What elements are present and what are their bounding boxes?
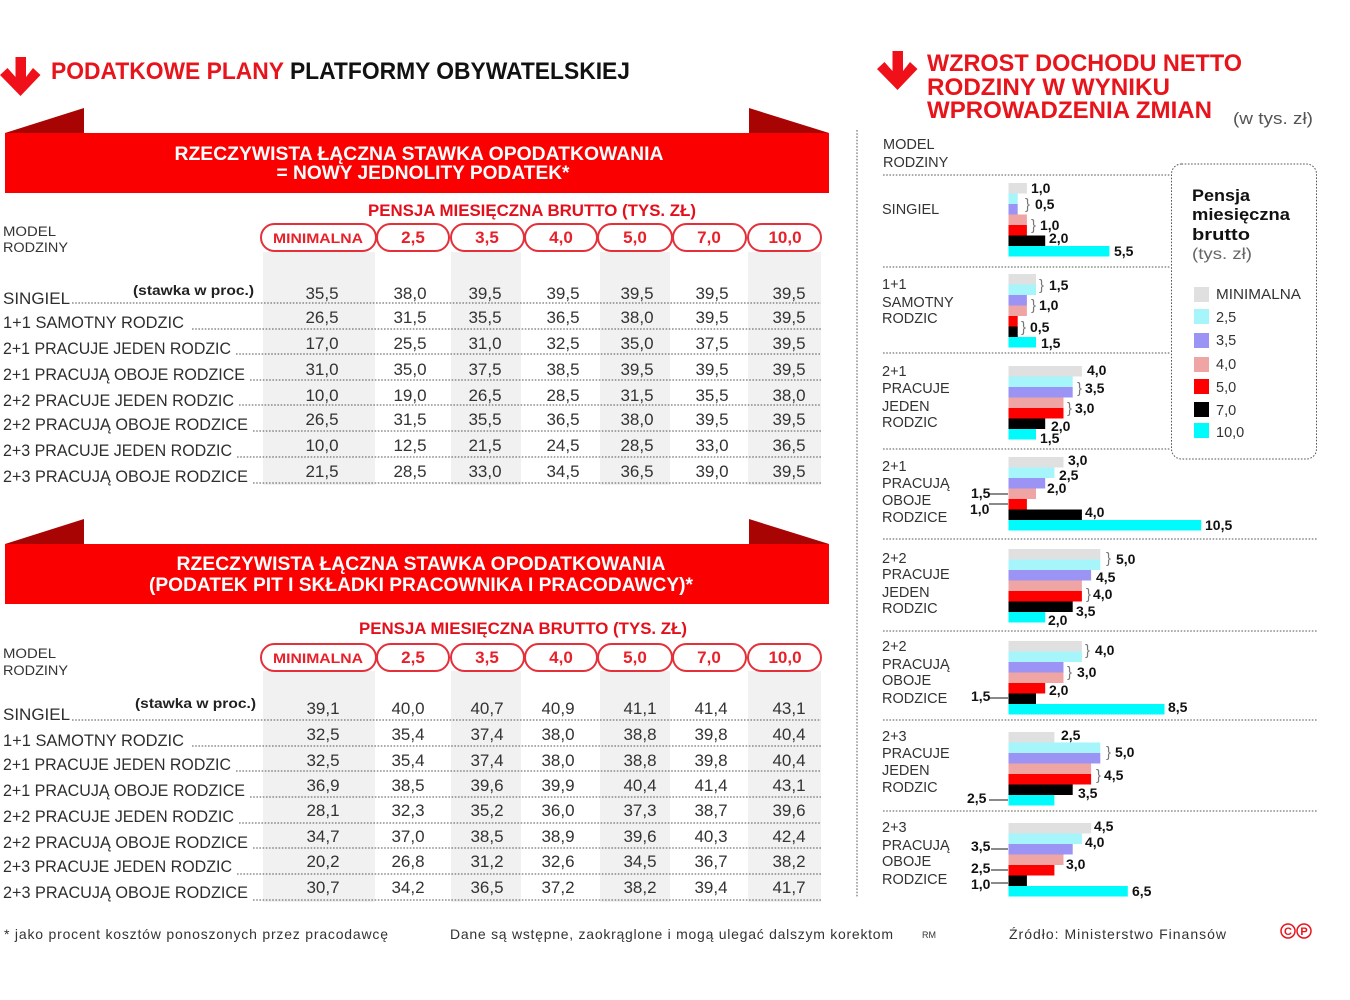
chart group: singiel: 2,0 xyxy=(1049,230,1069,246)
pills: bottom table header: 4,0 xyxy=(549,648,573,667)
table: bottom rates: 36,0 xyxy=(541,801,575,820)
banner: top table xyxy=(5,108,829,193)
pills: top table header xyxy=(261,224,821,251)
table: top rates: 31,0 xyxy=(305,360,339,379)
table: top rates: 21,5 xyxy=(468,436,502,455)
legend panel xyxy=(1172,164,1316,459)
table: top rates: 39,5 xyxy=(695,308,729,327)
table: bottom rates: 37,3 xyxy=(623,801,657,820)
chart group: singiel xyxy=(882,180,1134,259)
table: top rates: 35,0 xyxy=(393,360,427,379)
table: top rates: 12,5 xyxy=(393,436,427,455)
pills: top table header: 3,5 xyxy=(475,228,499,247)
chart group: singiel: 1,0 xyxy=(1031,180,1051,196)
table: top rates: 36,5 xyxy=(546,410,580,429)
table: top rates: 38,0 xyxy=(393,284,427,303)
banner: bottom table xyxy=(5,519,829,604)
table: top rates: 26,5 xyxy=(468,386,502,405)
chart group: 1+1 samotny rodzic: RODZIC xyxy=(882,311,938,327)
title: right: RODZINY W WYNIKU xyxy=(927,74,1170,101)
legend panel: 2,5 xyxy=(1216,310,1236,326)
chart group: 2+3 pracuje jeden rodzic: } xyxy=(1096,767,1101,784)
chart group: 2+3 pracują oboje rodzice: OBOJE xyxy=(882,854,931,870)
heading: family model bottom table: RODZINY xyxy=(3,663,68,678)
note: unit top table: (stawka w proc.) xyxy=(133,282,254,298)
chart group: 2+3 pracuje jeden rodzic: RODZIC xyxy=(882,780,938,796)
chart group: 1+1 samotny rodzic: } xyxy=(1021,319,1026,336)
table: bottom rates: 39,6 xyxy=(772,801,806,820)
chart group: 2+3 pracuje jeden rodzic: PRACUJE xyxy=(882,746,950,762)
table: bottom rates: 36,9 xyxy=(306,776,340,795)
table: bottom rates: 32,6 xyxy=(541,852,575,871)
table: top rates: 28,5 xyxy=(620,436,654,455)
legend panel: brutto xyxy=(1192,225,1250,244)
table: top rates: 28,5 xyxy=(546,386,580,405)
chart group: 2+2 pracuje jeden rodzic xyxy=(882,549,1136,628)
icon: copyright marks: P xyxy=(1300,926,1308,938)
source: Źródło: Ministerstwo Finansów xyxy=(1009,926,1227,942)
table: bottom rates: 35,2 xyxy=(470,801,504,820)
table: top rates: 1+1 SAMOTNY RODZIC xyxy=(3,313,184,332)
chart group: 2+1 pracują oboje rodzice: 1,0 xyxy=(970,501,990,517)
legend panel: 3,5 xyxy=(1216,333,1236,349)
table: top rates: 2+1 PRACUJE JEDEN RODZIC xyxy=(3,339,231,358)
chart group: 2+2 pracuje jeden rodzic: } xyxy=(1086,586,1091,603)
table: top rates: 31,5 xyxy=(393,308,427,327)
table: top rates: 2+2 PRACUJĄ OBOJE RODZICE xyxy=(3,415,248,434)
table: bottom rates: 41,4 xyxy=(694,699,728,718)
chart group: 1+1 samotny rodzic: } xyxy=(1039,277,1044,294)
chart group: 2+1 pracują oboje rodzice xyxy=(882,452,1232,533)
table: top rates: 28,5 xyxy=(393,462,427,481)
table: top rates: 19,0 xyxy=(393,386,427,405)
table: bottom rates: 30,7 xyxy=(306,878,340,897)
chart group: 2+2 pracują oboje rodzice: 8,5 xyxy=(1168,699,1188,715)
pills: top table header: 7,0 xyxy=(697,228,721,247)
table: bottom rates: 38,0 xyxy=(541,725,575,744)
chart group: 2+1 pracuje jeden rodzic: } xyxy=(1067,400,1072,417)
chart group: singiel: 5,5 xyxy=(1114,243,1134,259)
chart group: 2+3 pracuje jeden rodzic: 2,5 xyxy=(1061,727,1081,743)
banner: top table: = NOWY JEDNOLITY PODATEK* xyxy=(276,163,570,184)
chart group: 2+2 pracują oboje rodzice: OBOJE xyxy=(882,673,931,689)
table: bottom rates: 20,2 xyxy=(306,852,340,871)
chart group: 2+2 pracują oboje rodzice: } xyxy=(1067,664,1072,681)
chart group: singiel: 0,5 xyxy=(1035,196,1055,212)
chart group: 2+1 pracuje jeden rodzic: RODZIC xyxy=(882,415,938,431)
chart group: singiel: 1,0 xyxy=(1040,217,1060,233)
table: top rates: 39,5 xyxy=(620,284,654,303)
chart group: 2+1 pracuje jeden rodzic: 2,0 xyxy=(1051,418,1071,434)
table background: bottom columns xyxy=(263,671,821,902)
heading: chart family model: RODZINY xyxy=(883,155,949,171)
pills: top table header: 4,0 xyxy=(549,228,573,247)
chart group: 2+1 pracują oboje rodzice: 10,5 xyxy=(1205,517,1232,533)
chart group: 2+3 pracują oboje rodzice: 6,5 xyxy=(1132,883,1152,899)
chart group: 2+3 pracują oboje rodzice: 4,5 xyxy=(1094,818,1114,834)
unit note: (w tys. zł) xyxy=(1233,109,1313,128)
table: bottom rates: 41,1 xyxy=(623,699,657,718)
title: left: PODATKOWE PLANY PLATFORMY OBYWATELSKIEJ xyxy=(51,58,630,85)
table: bottom rates: 26,8 xyxy=(391,852,425,871)
table: bottom rates: 40,9 xyxy=(541,699,575,718)
table: bottom rates: 40,4 xyxy=(772,725,806,744)
table: bottom rates: 34,5 xyxy=(623,852,657,871)
chart group: 2+2 pracuje jeden rodzic: PRACUJE xyxy=(882,567,950,583)
table: bottom rates: 2+2 PRACUJE JEDEN RODZIC xyxy=(3,807,234,826)
table: bottom rates: 41,4 xyxy=(694,776,728,795)
table: top rates: 31,5 xyxy=(620,386,654,405)
table: bottom rates: 38,5 xyxy=(391,776,425,795)
chart group: 2+1 pracuje jeden rodzic: JEDEN xyxy=(882,399,930,415)
table: bottom rates: 36,5 xyxy=(470,878,504,897)
chart group: 2+3 pracują oboje rodzice: 1,0 xyxy=(971,876,991,892)
heading: chart family model xyxy=(883,137,949,171)
table: bottom rates: 40,4 xyxy=(772,751,806,770)
table: bottom rates: 43,1 xyxy=(772,699,806,718)
table: bottom rates: 37,4 xyxy=(470,751,504,770)
table: bottom rates: 2+3 PRACUJE JEDEN RODZIC xyxy=(3,857,232,876)
chart group: 2+2 pracuje jeden rodzic: } xyxy=(1106,550,1111,567)
heading: family model bottom table: MODEL xyxy=(3,646,57,661)
heading: chart family model: MODEL xyxy=(883,137,935,153)
chart group: 2+2 pracują oboje rodzice: 1,5 xyxy=(971,688,991,704)
table: top rates: 39,5 xyxy=(695,410,729,429)
table background: top columns xyxy=(263,252,821,485)
table: bottom rates: 40,4 xyxy=(623,776,657,795)
chart group: 1+1 samotny rodzic: } xyxy=(1031,297,1036,314)
legend panel: 5,0 xyxy=(1216,380,1236,396)
table: top rates: 39,5 xyxy=(468,284,502,303)
table: top rates: 21,5 xyxy=(305,462,339,481)
banner: bottom table: RZECZYWISTA ŁĄCZNA STAWKA OPODATKOWANIA xyxy=(176,554,666,575)
table: top rates: 33,0 xyxy=(695,436,729,455)
chart group: 2+2 pracuje jeden rodzic: 4,0 xyxy=(1093,586,1113,602)
table: bottom rates: 39,1 xyxy=(306,699,340,718)
table: bottom rates: 34,7 xyxy=(306,827,340,846)
pills: top table header: MINIMALNA xyxy=(273,230,363,246)
table: top rates: 35,5 xyxy=(468,308,502,327)
legend panel: miesięczna xyxy=(1192,205,1291,224)
table: top rates: 36,5 xyxy=(620,462,654,481)
footnote: * jako procent kosztów ponoszonych przez pracodawcę xyxy=(4,926,388,942)
chart group: 2+2 pracują oboje rodzice: RODZICE xyxy=(882,691,948,707)
table: top rates: 38,0 xyxy=(620,410,654,429)
heading: family model top table xyxy=(3,224,68,255)
table: top rates: 39,5 xyxy=(695,284,729,303)
chart group: 2+2 pracuje jeden rodzic: JEDEN xyxy=(882,585,930,601)
chart group: 2+3 pracuje jeden rodzic: JEDEN xyxy=(882,763,930,779)
chart group: 2+1 pracuje jeden rodzic xyxy=(882,362,1107,446)
table: bottom rates: 2+1 PRACUJE JEDEN RODZIC xyxy=(3,755,231,774)
table: bottom rates: 40,3 xyxy=(694,827,728,846)
heading: salary top table: PENSJA MIESIĘCZNA BRUTTO (TYS. ZŁ) xyxy=(368,201,696,220)
table: bottom rates: 32,5 xyxy=(306,725,340,744)
chart group: 1+1 samotny rodzic: 1,5 xyxy=(1049,277,1069,293)
chart group: 2+1 pracują oboje rodzice: PRACUJĄ xyxy=(882,476,950,492)
heading: family model bottom table xyxy=(3,646,68,678)
chart group: 2+1 pracują oboje rodzice: 2+1 xyxy=(882,459,907,475)
note: unit bottom table: (stawka w proc.) xyxy=(135,695,256,711)
table: top rates: 26,5 xyxy=(305,410,339,429)
legend panel: MINIMALNA xyxy=(1216,287,1301,303)
table: top rates: 26,5 xyxy=(305,308,339,327)
chart group: 2+3 pracują oboje rodzice: 2,5 xyxy=(971,860,991,876)
legend panel: 7,0 xyxy=(1216,403,1236,419)
table: bottom rates: 36,7 xyxy=(694,852,728,871)
chart group: 2+3 pracuje jeden rodzic: 2,5 xyxy=(967,790,987,806)
chart group: 2+1 pracują oboje rodzice: 3,0 xyxy=(1068,452,1088,468)
table: top rates: 35,5 xyxy=(305,284,339,303)
icon: copyright marks xyxy=(1281,924,1311,938)
chart group: 2+2 pracuje jeden rodzic: 2,0 xyxy=(1048,612,1068,628)
table: bottom rates: SINGIEL xyxy=(3,705,70,724)
chart group: 1+1 samotny rodzic xyxy=(882,274,1069,351)
table: bottom rates: 38,0 xyxy=(541,751,575,770)
chart group: 2+1 pracuje jeden rodzic: 3,0 xyxy=(1075,400,1095,416)
chart group: 1+1 samotny rodzic: 1,5 xyxy=(1041,335,1061,351)
chart group: 1+1 samotny rodzic: SAMOTNY xyxy=(882,295,954,311)
chart group: 2+1 pracują oboje rodzice: 2,0 xyxy=(1047,480,1067,496)
table: bottom rates: 38,7 xyxy=(694,801,728,820)
pills: top table header: 5,0 xyxy=(623,228,647,247)
heading: family model top table: RODZINY xyxy=(3,240,68,255)
table: top rates: 39,0 xyxy=(695,462,729,481)
title: right: WPROWADZENIA ZMIAN xyxy=(927,97,1212,124)
chart group: 2+1 pracują oboje rodzice: RODZICE xyxy=(882,510,948,526)
chart group: 2+2 pracują oboje rodzice xyxy=(882,639,1188,715)
banner: top table: RZECZYWISTA ŁĄCZNA STAWKA OPODATKOWANIA xyxy=(174,144,664,165)
table: top rates: 10,0 xyxy=(305,436,339,455)
table: bottom rates: 2+1 PRACUJĄ OBOJE RODZICE xyxy=(3,781,245,800)
table: top rates: 39,5 xyxy=(772,462,806,481)
table: bottom rates: 37,4 xyxy=(470,725,504,744)
table: bottom rates: 38,8 xyxy=(623,751,657,770)
table: top rates: 39,5 xyxy=(772,308,806,327)
chart group: 2+3 pracują oboje rodzice: RODZICE xyxy=(882,872,948,888)
table: top rates: 38,0 xyxy=(772,386,806,405)
icon: right title arrow xyxy=(877,51,918,90)
table: bottom rates: 40,0 xyxy=(391,699,425,718)
chart group: 2+2 pracują oboje rodzice: 2+2 xyxy=(882,639,907,655)
chart group: 2+2 pracuje jeden rodzic: 2+2 xyxy=(882,551,907,567)
pills: bottom table header: 2,5 xyxy=(401,648,425,667)
table: bottom rates: 28,1 xyxy=(306,801,340,820)
chart group: 2+2 pracuje jeden rodzic: 5,0 xyxy=(1116,551,1136,567)
chart group: 2+1 pracuje jeden rodzic: } xyxy=(1077,380,1082,397)
table: bottom rates: 35,4 xyxy=(391,725,425,744)
table: top rates: 39,5 xyxy=(546,284,580,303)
chart group: 2+2 pracuje jeden rodzic: RODZIC xyxy=(882,601,938,617)
table: top rates: 36,5 xyxy=(772,436,806,455)
chart group: 2+3 pracuje jeden rodzic xyxy=(882,727,1135,806)
chart group: 2+3 pracuje jeden rodzic: 4,5 xyxy=(1104,767,1124,783)
pills: bottom table header xyxy=(261,644,821,671)
table: bottom rates: 39,8 xyxy=(694,751,728,770)
chart group: 2+3 pracuje jeden rodzic: 3,5 xyxy=(1078,785,1098,801)
table: bottom rates xyxy=(3,699,821,902)
chart group: singiel: } xyxy=(1025,196,1030,213)
legend panel: 4,0 xyxy=(1216,357,1236,373)
table: top rates: 36,5 xyxy=(546,308,580,327)
heading: salary bottom table: PENSJA MIESIĘCZNA BRUTTO (TYS. ZŁ) xyxy=(359,619,687,638)
pills: bottom table header: 7,0 xyxy=(697,648,721,667)
chart group: 2+1 pracuje jeden rodzic: PRACUJE xyxy=(882,381,950,397)
table: bottom rates: 35,4 xyxy=(391,751,425,770)
pills: top table header: 10,0 xyxy=(768,228,802,247)
pills: top table header: 2,5 xyxy=(401,228,425,247)
legend panel: 10,0 xyxy=(1216,425,1244,441)
table: bottom rates: 38,9 xyxy=(541,827,575,846)
table: bottom rates: 32,3 xyxy=(391,801,425,820)
table: bottom rates: 38,2 xyxy=(772,852,806,871)
table: top rates: 35,5 xyxy=(468,410,502,429)
table: top rates: 17,0 xyxy=(305,334,339,353)
chart group: 2+1 pracuje jeden rodzic: 3,5 xyxy=(1085,380,1105,396)
chart group: 2+1 pracuje jeden rodzic: 1,5 xyxy=(1040,430,1060,446)
pills: bottom table header: 3,5 xyxy=(475,648,499,667)
table: top rates: 34,5 xyxy=(546,462,580,481)
table: top rates: 38,0 xyxy=(620,308,654,327)
table: bottom rates: 39,8 xyxy=(694,725,728,744)
chart group: 2+3 pracuje jeden rodzic: 5,0 xyxy=(1115,744,1135,760)
chart group: 2+2 pracują oboje rodzice: 3,0 xyxy=(1077,664,1097,680)
table: top rates: 39,5 xyxy=(620,360,654,379)
chart group: 2+1 pracuje jeden rodzic: 4,0 xyxy=(1087,362,1107,378)
table: bottom rates: 2+2 PRACUJĄ OBOJE RODZICE xyxy=(3,833,248,852)
table: top rates: 31,0 xyxy=(468,334,502,353)
chart group: 2+2 pracuje jeden rodzic: 3,5 xyxy=(1076,603,1096,619)
table: bottom rates: 34,2 xyxy=(391,878,425,897)
table: bottom rates: 39,6 xyxy=(623,827,657,846)
pills: bottom table header: MINIMALNA xyxy=(273,650,363,666)
chart group: singiel: } xyxy=(1031,217,1036,234)
table: top rates: SINGIEL xyxy=(3,289,70,308)
chart group: 2+3 pracują oboje rodzice: 3,0 xyxy=(1066,856,1086,872)
table: bottom rates: 40,7 xyxy=(470,699,504,718)
table: bottom rates: 31,2 xyxy=(470,852,504,871)
legend panel: (tys. zł) xyxy=(1192,246,1252,263)
chart group: 2+3 pracuje jeden rodzic: } xyxy=(1106,744,1111,761)
table: top rates: 32,5 xyxy=(546,334,580,353)
table: bottom rates: 43,1 xyxy=(772,776,806,795)
table: top rates: 10,0 xyxy=(305,386,339,405)
table: top rates: 37,5 xyxy=(468,360,502,379)
legend panel: Pensja xyxy=(1192,186,1251,205)
table: top rates: 2+1 PRACUJĄ OBOJE RODZICE xyxy=(3,365,245,384)
pills: bottom table header: 10,0 xyxy=(768,648,802,667)
disclaimer: Dane są wstępne, zaokrąglone i mogą ulegać dalszym korektom xyxy=(450,926,893,942)
table: bottom rates: 39,9 xyxy=(541,776,575,795)
table: top rates: 39,5 xyxy=(772,334,806,353)
table: bottom rates: 39,4 xyxy=(694,878,728,897)
chart group: 2+2 pracują oboje rodzice: PRACUJĄ xyxy=(882,657,950,673)
chart group: 2+1 pracują oboje rodzice: OBOJE xyxy=(882,493,931,509)
table: top rates: 2+3 PRACUJĄ OBOJE RODZICE xyxy=(3,467,248,486)
title: right: WZROST DOCHODU NETTO xyxy=(927,50,1242,77)
table: bottom rates: 32,5 xyxy=(306,751,340,770)
table: top rates: 2+2 PRACUJE JEDEN RODZIC xyxy=(3,391,234,410)
chart group: 2+1 pracuje jeden rodzic: 2+1 xyxy=(882,364,907,380)
table: bottom rates: 42,4 xyxy=(772,827,806,846)
table: top rates: 37,5 xyxy=(695,334,729,353)
chart group: 2+2 pracuje jeden rodzic: 4,5 xyxy=(1096,569,1116,585)
chart group: 2+2 pracują oboje rodzice: } xyxy=(1085,642,1090,659)
table: bottom rates: 39,6 xyxy=(470,776,504,795)
chart group: 1+1 samotny rodzic: 1+1 xyxy=(882,277,907,293)
table: bottom rates: 1+1 SAMOTNY RODZIC xyxy=(3,731,184,750)
icon: copyright marks: C xyxy=(1284,926,1292,938)
table: bottom rates: 38,8 xyxy=(623,725,657,744)
chart group: 2+1 pracują oboje rodzice: 2,5 xyxy=(1059,467,1079,483)
table: top rates: 39,5 xyxy=(772,360,806,379)
chart group: 2+3 pracują oboje rodzice xyxy=(882,818,1152,899)
banner: bottom table: (PODATEK PIT I SKŁADKI PRACOWNIKA I PRACODAWCY)* xyxy=(149,575,694,596)
table: top rates: 31,5 xyxy=(393,410,427,429)
chart group: 2+1 pracują oboje rodzice: 4,0 xyxy=(1085,504,1105,520)
table: bottom rates: 2+3 PRACUJĄ OBOJE RODZICE xyxy=(3,883,248,902)
table: top rates xyxy=(3,284,821,486)
chart group: singiel: SINGIEL xyxy=(882,202,939,218)
chart group: 2+3 pracują oboje rodzice: PRACUJĄ xyxy=(882,838,950,854)
table: top rates: 24,5 xyxy=(546,436,580,455)
table: bottom rates: 37,2 xyxy=(541,878,575,897)
heading: family model top table: MODEL xyxy=(3,224,57,239)
table: top rates: 39,5 xyxy=(695,360,729,379)
table: top rates: 33,0 xyxy=(468,462,502,481)
table: top rates: 35,0 xyxy=(620,334,654,353)
table: bottom rates: 37,0 xyxy=(391,827,425,846)
author mark: RM xyxy=(922,930,936,940)
icon: left title arrow xyxy=(0,57,40,96)
pills: bottom table header: 5,0 xyxy=(623,648,647,667)
table: top rates: 25,5 xyxy=(393,334,427,353)
chart group: 2+2 pracują oboje rodzice: 2,0 xyxy=(1049,682,1069,698)
chart group: 2+3 pracują oboje rodzice: 4,0 xyxy=(1085,834,1105,850)
title: right xyxy=(927,50,1242,124)
chart group: 2+3 pracują oboje rodzice: 2+3 xyxy=(882,820,907,836)
chart group: 2+1 pracują oboje rodzice: 1,5 xyxy=(971,485,991,501)
table: top rates: 38,5 xyxy=(546,360,580,379)
chart group: 1+1 samotny rodzic: 1,0 xyxy=(1039,297,1059,313)
chart group: 2+3 pracują oboje rodzice: 3,5 xyxy=(971,838,991,854)
table: top rates: 2+3 PRACUJE JEDEN RODZIC xyxy=(3,441,232,460)
table: top rates: 39,5 xyxy=(772,410,806,429)
table: top rates: 39,5 xyxy=(772,284,806,303)
chart group: 1+1 samotny rodzic: 0,5 xyxy=(1030,319,1050,335)
table: bottom rates: 41,7 xyxy=(772,878,806,897)
table: bottom rates: 38,5 xyxy=(470,827,504,846)
table: top rates: 35,5 xyxy=(695,386,729,405)
chart group: 2+2 pracują oboje rodzice: 4,0 xyxy=(1095,642,1115,658)
chart group: 2+3 pracuje jeden rodzic: 2+3 xyxy=(882,729,907,745)
table: bottom rates: 38,2 xyxy=(623,878,657,897)
